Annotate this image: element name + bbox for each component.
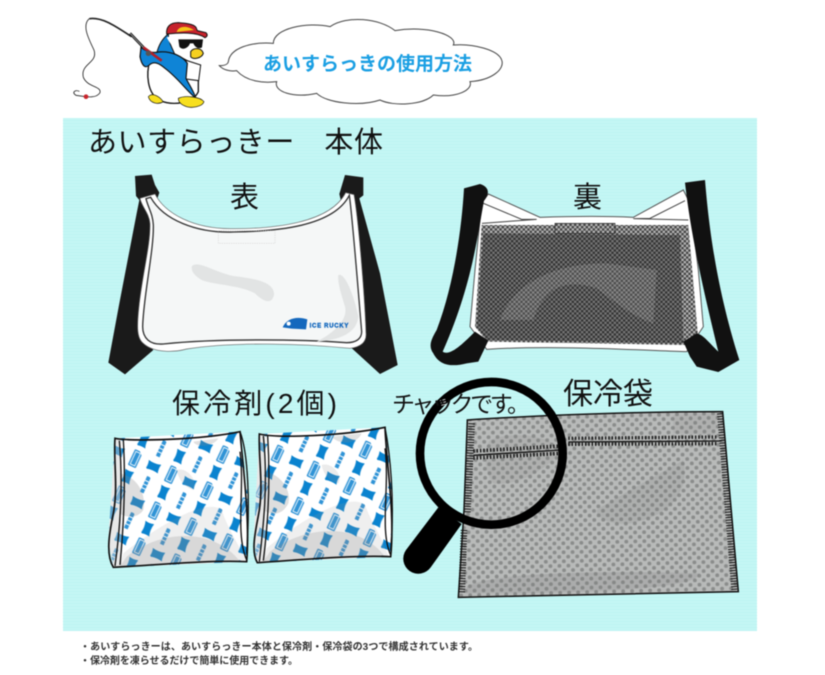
cold packs [107, 426, 394, 569]
mesh tab [555, 223, 615, 233]
logo text: ICE RUCKY [310, 323, 348, 329]
heading: main body: あいすらっきー 本体 [88, 126, 383, 159]
mesh panel [475, 225, 698, 345]
bag body back [470, 190, 703, 352]
heading: cooler bag: 保冷袋 [563, 378, 653, 411]
towel [183, 60, 201, 81]
right strap [339, 175, 398, 374]
footnote line 2: ・保冷剤を凍らせるだけで簡単に使用できます。 [80, 654, 298, 667]
fishing rod [130, 33, 143, 47]
callout: zip: チャックです。 [392, 391, 530, 417]
cold pack 1 [107, 430, 250, 569]
cold pack 2 [252, 426, 394, 564]
penguin wing [140, 47, 196, 98]
penguin face [167, 35, 206, 61]
sunglasses [178, 39, 203, 49]
logo fish [283, 318, 307, 329]
label: front: 表 [230, 181, 259, 214]
penguin body [148, 52, 198, 103]
beak [191, 49, 203, 58]
side stitches [462, 423, 472, 593]
left strap [431, 184, 488, 365]
bag outline [458, 412, 738, 597]
speech cloud with title [219, 19, 502, 104]
left strap [108, 175, 159, 374]
label: back: 裏 [573, 181, 602, 214]
feet [148, 95, 163, 103]
title: あいすらっきの使用方法 [263, 52, 472, 75]
product: front of bag [108, 175, 398, 374]
show-through shading [500, 263, 657, 323]
magnifier handle [403, 507, 462, 574]
penguin neck [157, 34, 175, 55]
cap [167, 23, 207, 38]
right strap [683, 180, 739, 372]
product: back of bag [431, 180, 739, 372]
magnifier ring [420, 382, 563, 525]
cooler bag [458, 412, 738, 597]
zip detail magnified [473, 450, 562, 455]
white marks on ring [440, 399, 447, 405]
mascot: fishing penguin [130, 23, 207, 107]
zip [568, 439, 722, 444]
cooler bag with magnifier [403, 382, 738, 597]
panel: product contents [63, 118, 757, 631]
dashed patch [218, 231, 275, 243]
mesh inner pocket [477, 233, 683, 343]
heading: cold packs: 保冷剤(2個) [172, 388, 337, 419]
footnotes [80, 640, 478, 667]
fishing line and bobber [74, 18, 132, 99]
footnote line 1: ・あいすらっきーは、あいすらっきー本体と保冷剤・保冷袋の3つで構成されています。 [80, 640, 478, 653]
cloud bubble [219, 19, 502, 104]
shadow marks [192, 264, 274, 301]
bag body [138, 193, 366, 351]
magnifier [403, 382, 563, 574]
logo [283, 318, 348, 329]
